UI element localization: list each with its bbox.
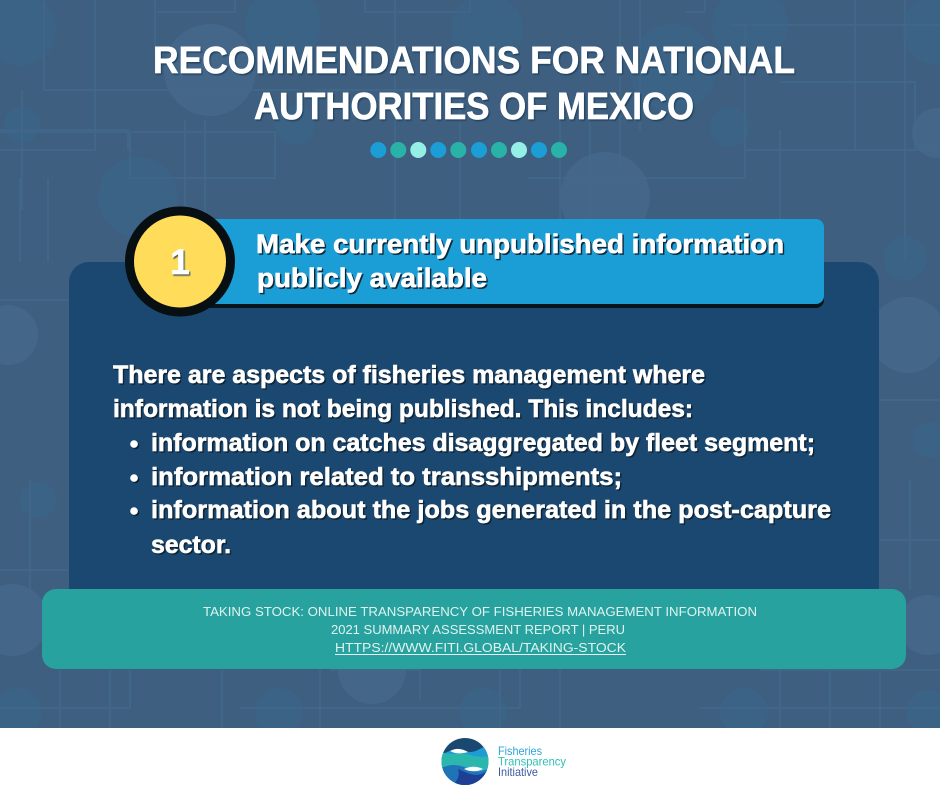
bullet list: information about the jobs generated in the post-capture xyxy=(151,496,831,524)
title: AUTHORITIES OF MEXICO xyxy=(254,86,694,128)
number badge: 1 xyxy=(170,243,190,282)
body text: There are aspects of fisheries management where xyxy=(113,361,705,389)
heading banner: Make currently unpublished information xyxy=(256,229,784,259)
bullet list: information on catches disaggregated by fleet segment; xyxy=(151,429,815,457)
panel: recommendation body xyxy=(69,262,879,612)
source box: TAKING STOCK: ONLINE TRANSPARENCY OF FISHERIES MANAGEMENT INFORMATION xyxy=(203,605,757,619)
footer band xyxy=(0,728,940,788)
heading banner: publicly available xyxy=(257,263,487,293)
logo wordmark: Transparency xyxy=(498,754,566,768)
icon: FiTI logo xyxy=(441,737,489,786)
logo wordmark: Initiative xyxy=(498,765,538,779)
number badge xyxy=(125,206,235,316)
body text xyxy=(113,361,831,559)
bullet list xyxy=(130,429,831,559)
body text: information is not being published. This includes: xyxy=(113,395,693,423)
decorative dot row xyxy=(370,142,567,158)
title xyxy=(153,40,795,128)
logo wordmark: Fisheries xyxy=(498,744,542,758)
source box: 2021 SUMMARY ASSESSMENT REPORT | PERU xyxy=(331,623,625,637)
source box xyxy=(42,589,906,669)
logo wordmark xyxy=(498,744,566,779)
source box: HTTPS://WWW.FITI.GLOBAL/TAKING-STOCK xyxy=(335,641,627,655)
title: RECOMMENDATIONS FOR NATIONAL xyxy=(153,40,795,82)
bullet list: information related to transshipments; xyxy=(151,463,622,491)
bullet list: sector. xyxy=(151,531,231,559)
heading banner xyxy=(190,219,824,308)
